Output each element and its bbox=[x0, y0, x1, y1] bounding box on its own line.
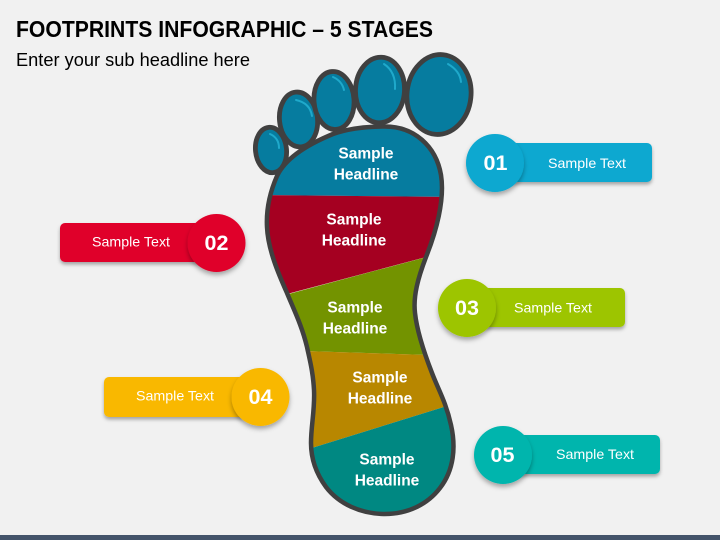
segment labels: Sample bbox=[327, 300, 383, 316]
footer bar bbox=[0, 535, 720, 540]
callout 04: Sample Text bbox=[136, 388, 214, 404]
subtitle: Enter your sub headline here bbox=[16, 50, 250, 70]
toe highlights bbox=[270, 64, 461, 148]
callout 03: 03 bbox=[455, 296, 479, 320]
callout 05 bbox=[474, 426, 660, 484]
segment labels: Sample bbox=[338, 146, 394, 162]
callout 04: 04 bbox=[249, 385, 272, 409]
segment 4 bbox=[310, 351, 444, 448]
callout 01 bbox=[466, 134, 652, 192]
segment 3 bbox=[290, 258, 424, 355]
callout 03: Sample Text bbox=[514, 300, 592, 316]
segment labels bbox=[322, 146, 420, 490]
callout 03 bbox=[438, 279, 625, 337]
footprint illustration bbox=[250, 51, 475, 530]
callout 02: Sample Text bbox=[92, 234, 170, 250]
callout 05: Sample Text bbox=[556, 446, 634, 462]
callout 04 bbox=[104, 368, 290, 426]
callout 02 bbox=[60, 214, 246, 272]
callout 01: Sample Text bbox=[548, 155, 626, 171]
segment labels: Headline bbox=[323, 320, 388, 338]
callout 01: 01 bbox=[484, 151, 507, 175]
sole segments bbox=[269, 128, 452, 512]
segment labels: Headline bbox=[334, 166, 399, 184]
segment labels: Sample bbox=[326, 212, 382, 228]
callout 02: 02 bbox=[205, 231, 228, 255]
segment labels: Sample bbox=[359, 452, 415, 468]
icon: toes bbox=[253, 51, 475, 174]
segment labels: Headline bbox=[322, 232, 387, 250]
segment 2 bbox=[269, 195, 440, 294]
title: FOOTPRINTS INFOGRAPHIC – 5 STAGES bbox=[16, 16, 433, 42]
callout 05: 05 bbox=[491, 443, 514, 467]
segment 5 bbox=[313, 407, 452, 512]
segment labels: Headline bbox=[348, 390, 413, 408]
segment labels: Sample bbox=[352, 370, 408, 386]
segment labels: Headline bbox=[355, 472, 420, 490]
foot outline bbox=[267, 126, 453, 514]
segment 1 bbox=[272, 128, 440, 197]
